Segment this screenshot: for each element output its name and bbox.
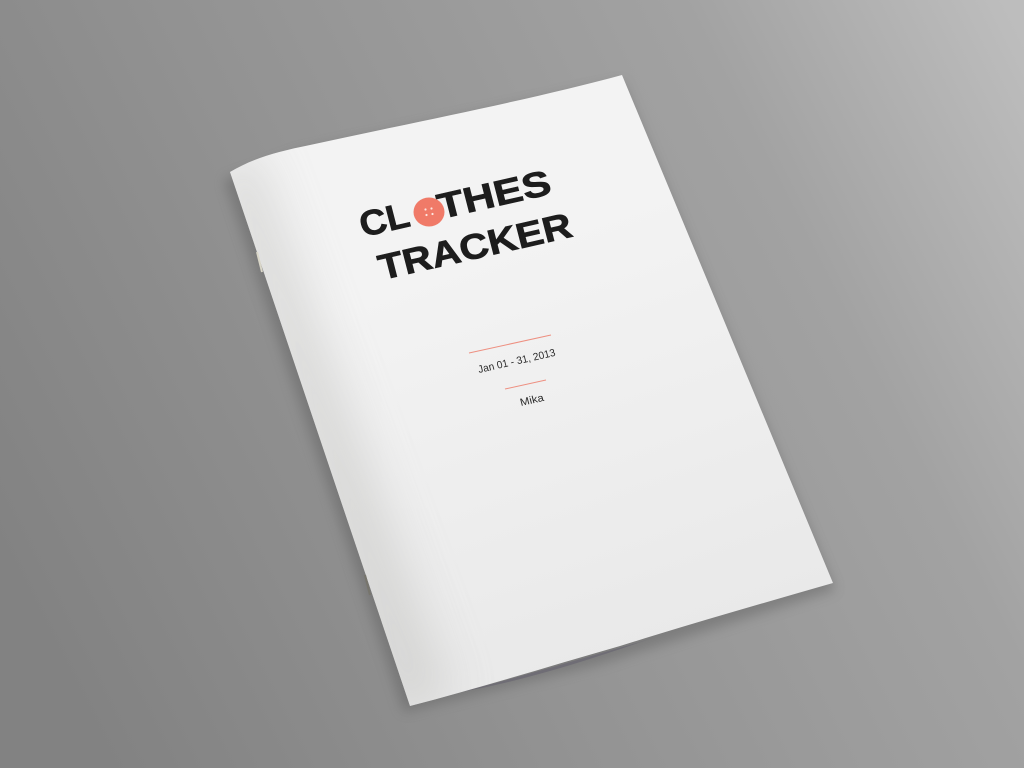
- brochure: [215, 75, 835, 720]
- inner pages: [460, 637, 655, 692]
- name: Mika: [519, 392, 545, 409]
- title word part: CL: CL: [355, 195, 414, 245]
- front cover: [230, 75, 833, 706]
- date: Jan 01 - 31, 2013: [477, 347, 557, 376]
- lower divider: [505, 380, 546, 389]
- title word part: THES: THES: [433, 162, 555, 227]
- top divider: [469, 335, 551, 353]
- title: [355, 162, 576, 288]
- staple bottom: [365, 575, 370, 595]
- title word: TRACKER: TRACKER: [374, 205, 576, 288]
- icon: coral button: [414, 198, 444, 226]
- spine fold shading: [230, 158, 450, 706]
- brochure shadow: [224, 82, 835, 712]
- staple top: [257, 252, 262, 272]
